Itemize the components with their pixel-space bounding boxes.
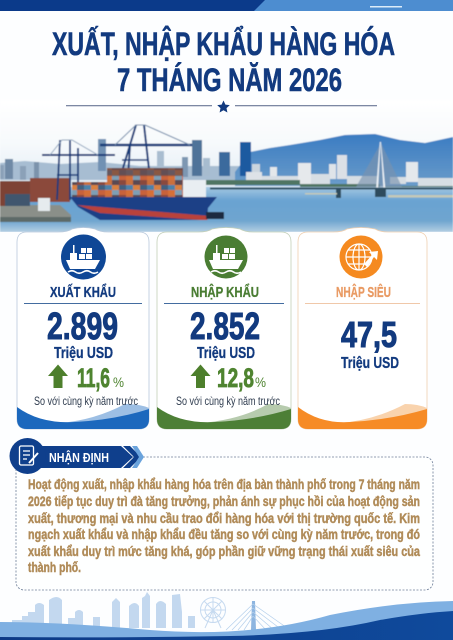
port dock [0,205,71,221]
footer wave [0,601,453,640]
stacked containers on dock [0,178,70,211]
heading: XUẤT KHẨU [50,283,116,301]
commentary text: thành phố. [28,560,81,575]
page below photo [0,232,453,432]
top banner [0,0,453,11]
wave: orange [298,404,427,429]
harbour photo illustration [0,100,453,232]
cable-stayed bridge [210,142,453,198]
growth arrow [190,364,210,388]
mountains [235,134,453,186]
value: 2.899 [47,306,118,348]
city skyline [0,139,418,184]
panel: nhập siêu [298,228,427,429]
growth value: % [255,374,266,390]
icon: globe with arrow [340,236,382,278]
wave: green [157,404,291,429]
badge: heading ribbon [10,438,144,474]
value: 2.852 [190,306,260,348]
commentary text [28,477,420,575]
icon: clipboard [20,446,38,465]
growth value: 12,8 [217,363,254,393]
icon: import ship [204,236,248,278]
badge: heading ribbon: NHẬN ĐỊNH [49,450,109,465]
unit: Triệu USD [341,355,399,372]
value: 47,5 [341,314,397,355]
tree line [205,180,453,190]
growth arrow [48,364,68,388]
growth value: % [113,374,124,390]
growth value: 11,6 [77,363,110,393]
gantry cranes [42,125,192,200]
container ship [70,168,224,220]
title [52,26,395,98]
icon: export ship [61,234,106,280]
distant hills [0,161,250,180]
panel: nhận định [10,438,433,590]
panel: xuất khẩu [17,228,149,429]
heading: NHẬP KHẨU [191,283,259,301]
title: 7 THÁNG NĂM 2026 [117,62,342,98]
water [0,187,453,232]
comparison note: So với cùng kỳ năm trước [176,394,280,408]
waterfront low-rise [262,174,453,186]
wave: blue [17,404,149,429]
unit: Triệu USD [197,345,255,362]
footer city silhouette [12,592,290,630]
heading: NHẬP SIÊU [336,283,391,301]
unit: Triệu USD [54,345,113,362]
panel: nhập khẩu [157,228,291,429]
title divider with star [66,100,377,112]
comparison note: So với cùng kỳ năm trước [34,394,138,408]
